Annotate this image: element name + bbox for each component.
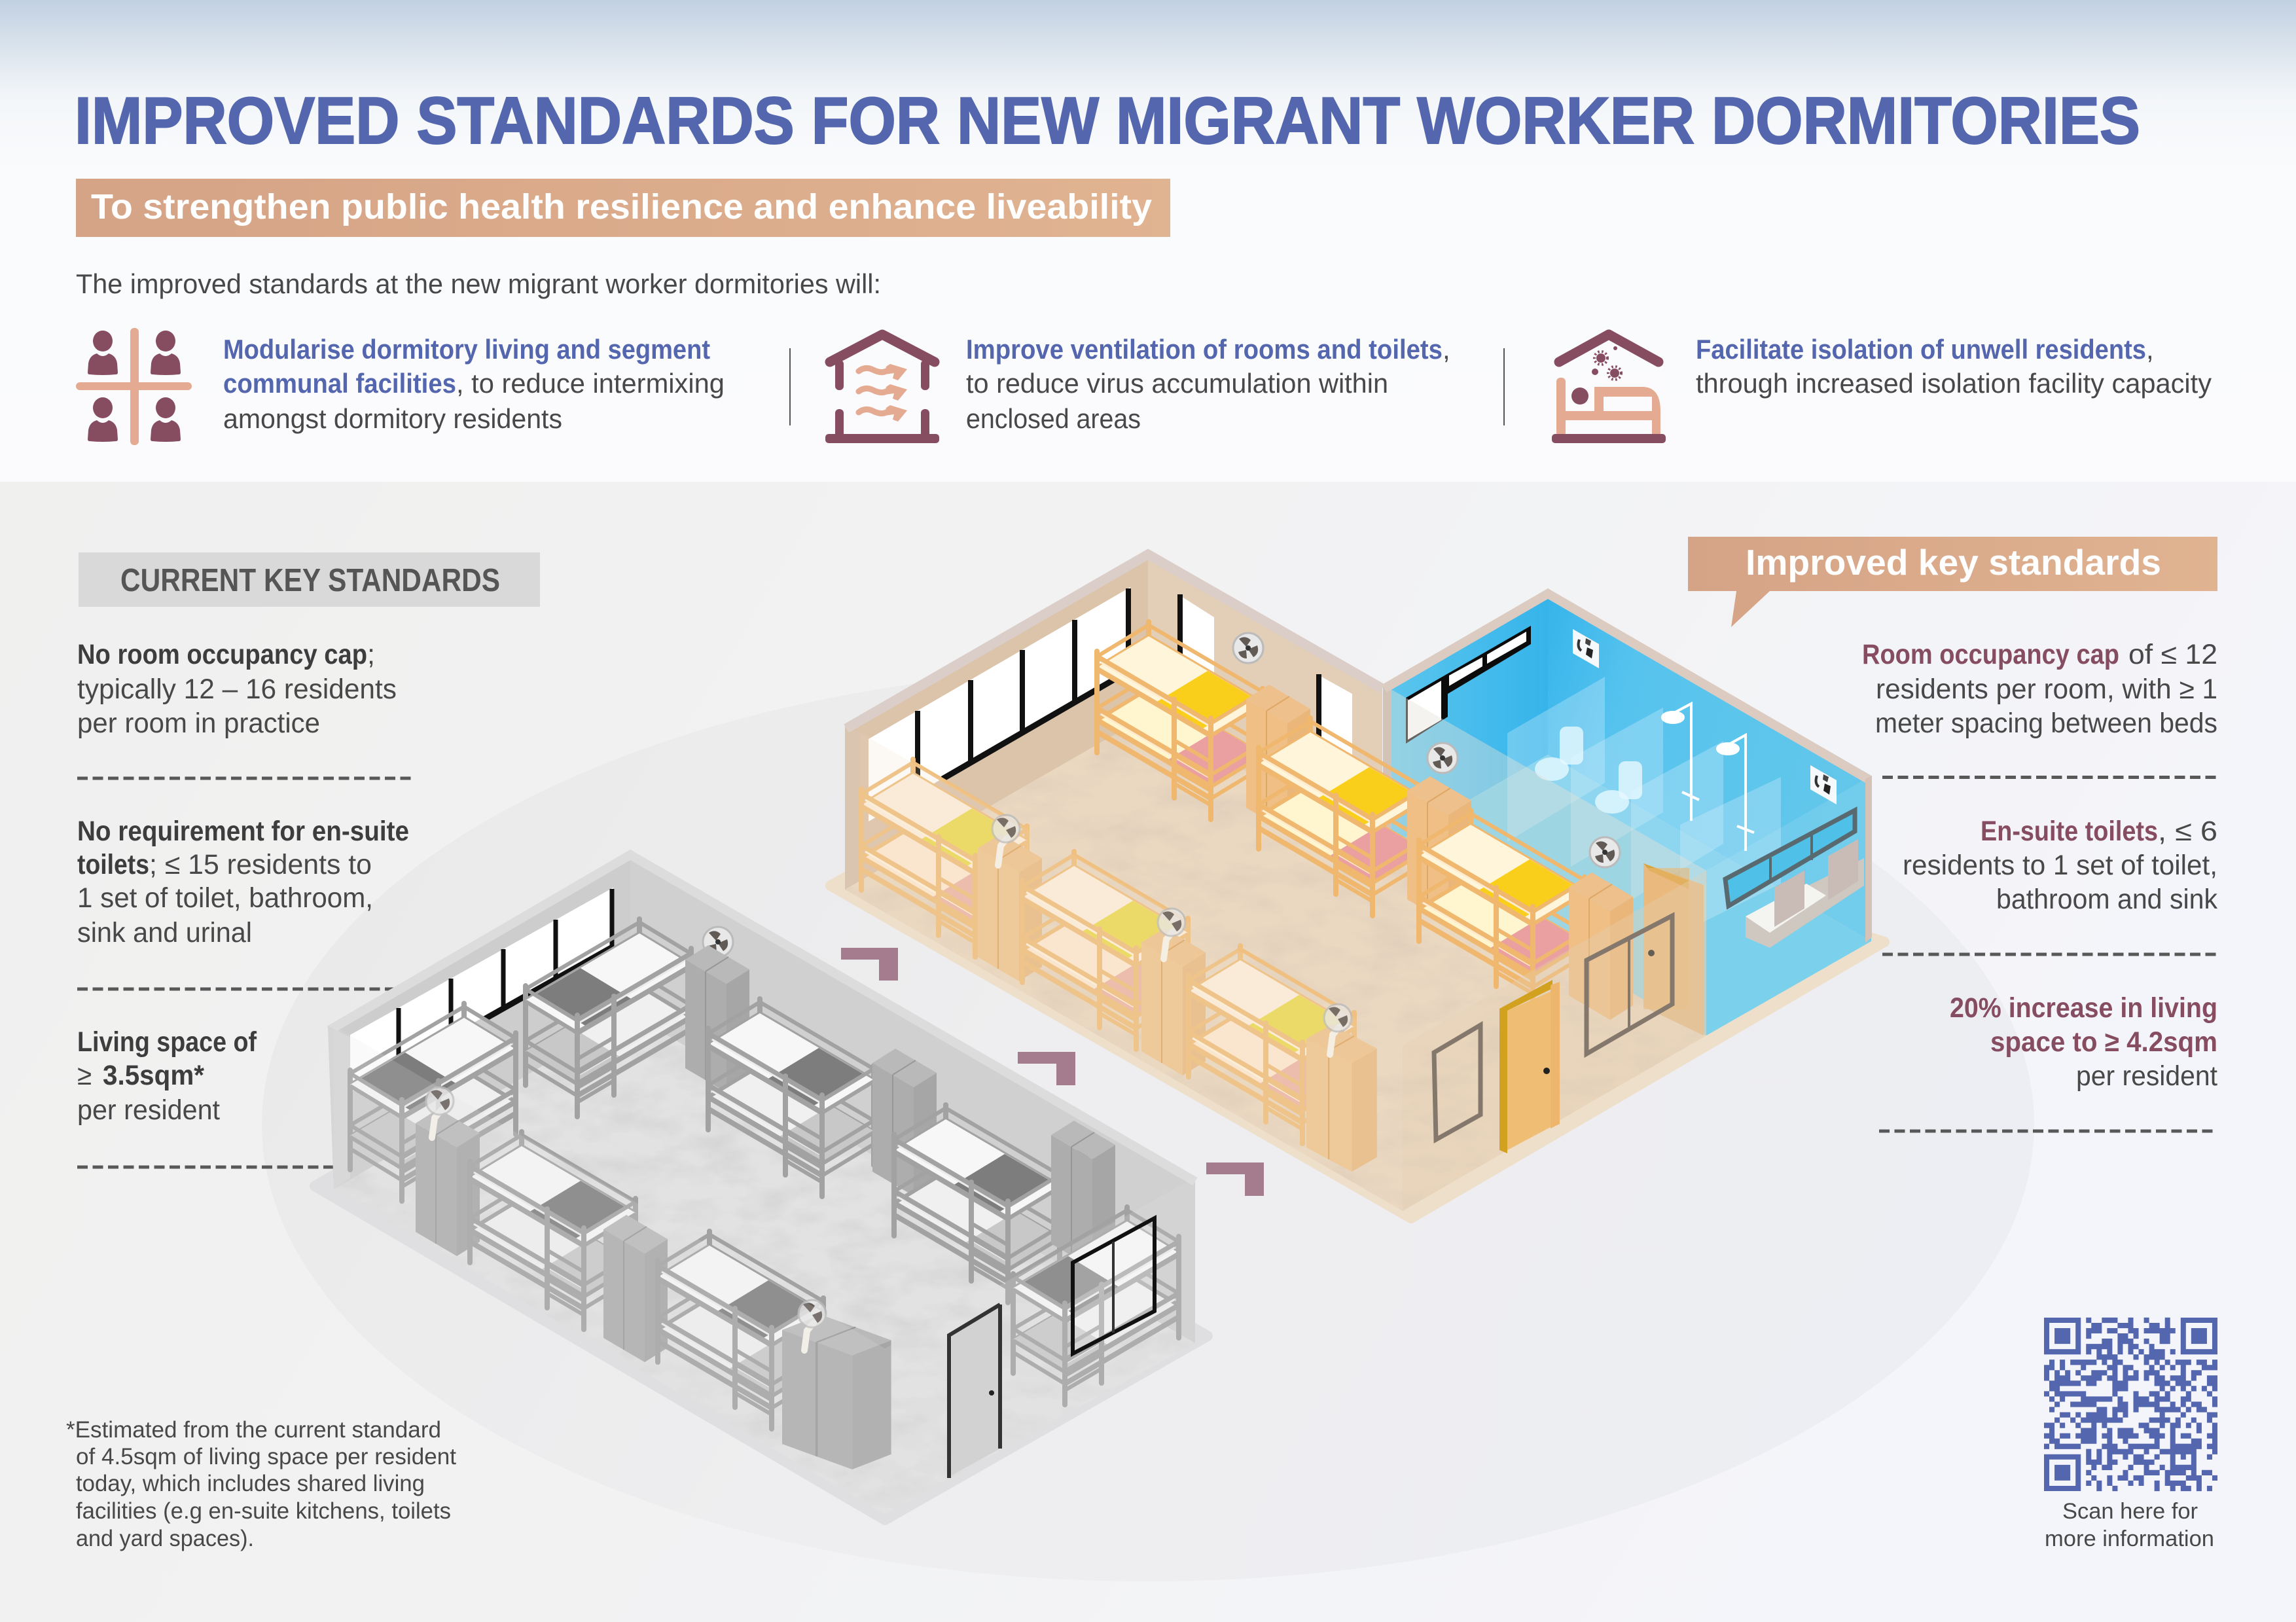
text: isolation: Facilitate isolation of unwell residents <box>1696 334 2146 365</box>
arrows from current to improved <box>841 948 1264 1196</box>
current standards header: CURRENT KEY STANDARDS <box>120 563 500 598</box>
text: modularise: Modularise dormitory living and segment <box>223 334 710 365</box>
toilets <box>1535 727 1642 814</box>
current standard: living space: per resident <box>77 1094 220 1126</box>
current standard: toilets: 1 set of toilet, bathroom, <box>77 882 373 914</box>
sliding window <box>1587 916 1672 1054</box>
translucent partition wall <box>1383 685 1706 1036</box>
icon: house with ventilation arrows <box>825 334 939 443</box>
improved standard: toilets: En-suite toilets <box>1981 816 2158 847</box>
text: isolation <box>1696 334 2212 399</box>
footnote: facilities (e.g en-suite kitchens, toilets <box>76 1498 451 1524</box>
QR caption: more information <box>2045 1526 2214 1551</box>
front bathroom wall: window and sinks <box>1706 776 1871 1036</box>
icon: modular cross with four residents <box>76 328 192 445</box>
improved standard: living space: 20% increase in living <box>1950 992 2217 1024</box>
QR caption <box>2045 1499 2214 1551</box>
current standard: toilets: No requirement for en-suite <box>77 816 409 847</box>
bathroom window <box>1406 626 1531 744</box>
current standard: room occupancy <box>77 639 397 739</box>
intro sentence: The improved standards at the new migrant worker dormitories will: <box>76 268 881 299</box>
text: ventilation: , <box>1443 334 1450 365</box>
improved standards speech bubble <box>1688 537 2217 627</box>
framed mirror window <box>1434 1025 1480 1140</box>
current standard: toilets: toilets <box>77 849 149 880</box>
improved standard: room occupancy: meter spacing between beds <box>1875 708 2217 739</box>
current standard: living space: Living space of <box>77 1026 257 1058</box>
improved standard: room occupancy: of ≤ 12 <box>2128 639 2217 670</box>
partition door panel <box>1643 863 1704 1036</box>
text: modularise: , to reduce intermixing <box>456 368 725 399</box>
icon: isolation bed under roof with virus <box>1552 334 1666 443</box>
title: IMPROVED STANDARDS FOR NEW MIGRANT WORKER DORMITORIES <box>75 84 2140 158</box>
text: ventilation <box>966 334 1450 434</box>
translucent front wall wash <box>334 1026 885 1515</box>
current standard: living space: 3.5sqm* <box>103 1060 204 1091</box>
text: ventilation: enclosed areas <box>966 403 1141 434</box>
sliding window on gray wall <box>1073 1218 1155 1354</box>
current standard: toilets <box>77 816 409 948</box>
improved standard: toilets <box>1903 816 2217 915</box>
main door <box>1499 980 1560 1153</box>
glass partitions <box>1507 677 1781 933</box>
subtitle banner <box>76 179 1170 237</box>
orange and blue isometric room: improved dormitory <box>831 550 1884 1218</box>
improved standard: room occupancy: Room occupancy cap <box>1862 639 2119 670</box>
window on left wall <box>869 587 1132 821</box>
text: isolation: , <box>2146 334 2154 365</box>
current standard: room occupancy: No room occupancy cap <box>77 639 367 670</box>
current standard: living space: ≥ <box>77 1060 92 1091</box>
text: modularise: amongst dormitory residents <box>223 403 562 434</box>
text: ventilation: to reduce virus accumulation within <box>966 368 1388 399</box>
text: ventilation: Improve ventilation of rooms and toilets <box>966 334 1443 365</box>
current standard: room occupancy: typically 12 – 16 residents <box>77 674 397 705</box>
footnote <box>66 1417 456 1551</box>
showers <box>1662 704 1754 851</box>
footnote: today, which includes shared living <box>76 1471 425 1496</box>
improved standard: toilets: , ≤ 6 <box>2158 816 2217 847</box>
text: modularise: communal facilities <box>223 368 456 399</box>
current standards header <box>79 552 540 607</box>
improved standard: room occupancy <box>1862 639 2217 739</box>
subtitle banner: To strengthen public health resilience and enhance liveability <box>91 187 1152 226</box>
window on gray wall <box>350 888 613 1092</box>
current standard: room occupancy: ; <box>367 639 375 670</box>
text: modularise <box>223 334 725 434</box>
bunk beds and lockers <box>1097 622 1263 820</box>
footnote: *Estimated from the current standard <box>66 1417 441 1443</box>
current standard: room occupancy: per room in practice <box>77 708 320 739</box>
text: isolation: through increased isolation facility capacity <box>1696 368 2212 399</box>
improved standards speech bubble: Improved key standards <box>1746 542 2161 583</box>
gray isometric room: current dormitory <box>315 850 1208 1520</box>
footnote: and yard spaces). <box>76 1526 254 1551</box>
improved standard: living space <box>1950 992 2217 1092</box>
QR code <box>2044 1318 2217 1491</box>
windows on right wall <box>1178 594 1352 759</box>
bathroom: blue walls and floor <box>1383 589 1872 1036</box>
current standard: living space <box>77 1026 257 1126</box>
improved standard: living space: per resident <box>2076 1060 2217 1092</box>
improved standard: room occupancy: residents per room, with ≥ 1 <box>1876 674 2217 705</box>
current standard: toilets: sink and urinal <box>77 917 252 948</box>
translucent front wall wash <box>845 724 1403 1211</box>
footnote: of 4.5sqm of living space per resident <box>76 1444 456 1469</box>
QR caption: Scan here for <box>2062 1499 2198 1524</box>
current standard: toilets: ; ≤ 15 residents to <box>149 849 372 880</box>
improved standard: toilets: residents to 1 set of toilet, <box>1903 850 2217 881</box>
improved standard: living space: space to ≥ 4.2sqm <box>1990 1026 2217 1058</box>
improved standard: toilets: bathroom and sink <box>1996 884 2217 915</box>
door on gray wall <box>949 1305 1000 1478</box>
